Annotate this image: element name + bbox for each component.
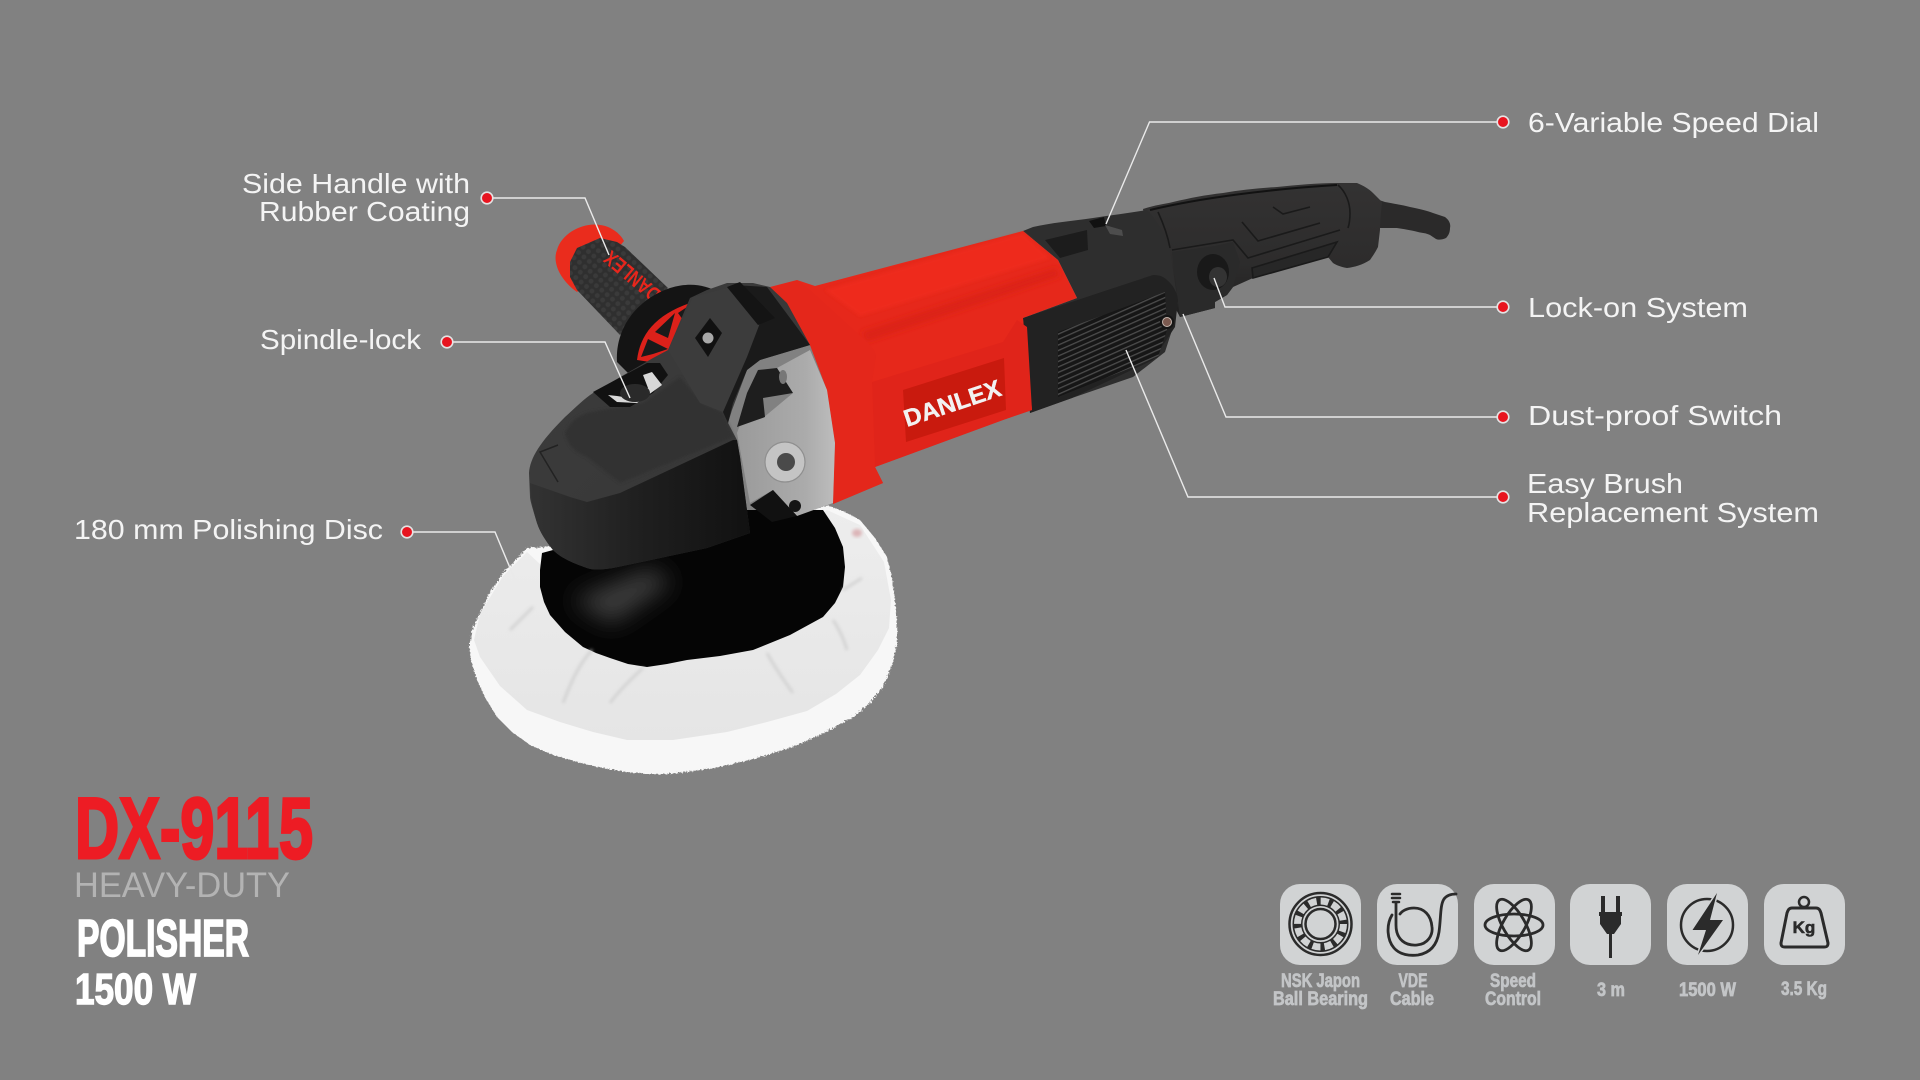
silver gearbox [737, 350, 835, 522]
end cap seam [1338, 185, 1350, 228]
label: Spindle-lock: Spindle-lock [260, 324, 422, 355]
label: Side Handle with Rubber Coating: Side Handle with [242, 168, 470, 199]
spindle lock [608, 372, 662, 403]
speed dial [1089, 217, 1123, 236]
gearbox bolt [789, 500, 801, 512]
dot [1497, 301, 1509, 313]
guard outer shell [529, 283, 810, 570]
spec: speed control [1474, 884, 1555, 1010]
caption: 3 m [1597, 980, 1625, 1001]
callout leader: lock-on system [1214, 278, 1509, 313]
callout leader: easy brush replacement [1126, 350, 1509, 503]
flange rim [617, 285, 718, 385]
label: Lock-on System: Lock-on System [1528, 292, 1748, 323]
spindle window [593, 363, 668, 407]
label: 180 mm Polishing Disc: 180 mm Polishing Disc [74, 514, 383, 545]
label: Easy Brush Replacement System: Easy Brush [1527, 468, 1683, 499]
label: Side Handle with Rubber Coating [242, 168, 470, 227]
front collar [770, 280, 883, 504]
caption: Control [1485, 989, 1541, 1010]
callout leader: side handle [481, 192, 609, 255]
flange wells [641, 307, 687, 357]
logo: DANLEX [900, 375, 1005, 433]
label: Side Handle with Rubber Coating: Rubber Coating [259, 196, 470, 227]
spec: VDE cable [1377, 884, 1458, 1010]
caption: Speed [1490, 971, 1536, 992]
handle slot [1252, 242, 1337, 278]
lock panel [1172, 242, 1240, 317]
guard bolt [702, 332, 714, 344]
guard marking [540, 445, 558, 482]
icon: atom [1474, 884, 1555, 965]
icon: bearing [1280, 884, 1361, 965]
dot [1497, 116, 1509, 128]
logo plate [903, 358, 1006, 442]
top seam [1150, 185, 1337, 210]
dot [1497, 491, 1509, 503]
power cord [1376, 199, 1450, 240]
brush screw [1160, 315, 1174, 329]
dark switch housing [1023, 210, 1178, 413]
callout leader: spindle-lock [441, 336, 630, 398]
grip notch [1273, 207, 1310, 214]
brush vent [1058, 292, 1167, 397]
collar band [723, 285, 810, 423]
plate highlight [572, 568, 672, 624]
gearbox screw [779, 370, 787, 384]
clip tab [727, 282, 775, 325]
caption: VDE [1398, 971, 1428, 992]
black guard head [529, 282, 810, 570]
callout leader: polishing disc [401, 526, 523, 599]
dot [481, 192, 493, 204]
lower face [872, 320, 1032, 467]
spec: ball bearing [1273, 884, 1368, 1010]
caption: NSK Japon [1281, 971, 1360, 992]
body seam [1158, 212, 1170, 248]
spec: power [1667, 884, 1748, 1001]
side handle [556, 224, 718, 385]
heavy-duty: HEAVY-DUTY [74, 866, 290, 905]
label: Easy Brush Replacement System [1527, 468, 1819, 528]
fleece rim [469, 505, 897, 774]
rubber grip [570, 238, 668, 335]
icon: weight: Kg [1793, 918, 1815, 937]
caption [1273, 971, 1368, 1010]
label: Easy Brush Replacement System: Replacement System [1527, 497, 1819, 528]
boss bore [777, 453, 795, 471]
caption: 3.5 Kg [1781, 979, 1827, 1000]
guard bolt recess [695, 318, 722, 357]
wattage: 1500 W [75, 965, 196, 1014]
model number: DX-9115 [75, 781, 313, 877]
caption [1485, 971, 1541, 1010]
switch recess [1045, 230, 1088, 258]
icon: cable [1377, 884, 1458, 965]
dome [565, 377, 733, 483]
caption [1390, 971, 1434, 1010]
spec: cable length [1570, 884, 1651, 1001]
caption: Cable [1390, 989, 1434, 1010]
red motor body [770, 231, 1077, 504]
handle details [1150, 185, 1350, 278]
black backing plate [540, 510, 845, 667]
gearbox recess [737, 368, 793, 427]
rear handle [1143, 183, 1382, 317]
body base [797, 231, 1077, 504]
bonnet stain [852, 529, 862, 537]
top highlight [825, 233, 1050, 316]
icon: plug [1570, 884, 1651, 965]
flange red hub [637, 303, 692, 362]
underside shadow [750, 490, 797, 522]
lock panel edge [1172, 230, 1340, 258]
bonnet folds [510, 578, 862, 703]
caption: Ball Bearing [1273, 989, 1368, 1010]
ridge [862, 268, 1060, 342]
callout leader: dust-proof switch [1183, 314, 1509, 423]
polishing pad [469, 505, 897, 774]
callout leader: 6-variable speed dial [1106, 116, 1509, 224]
polisher: POLISHER [77, 910, 249, 968]
threaded boss [765, 442, 805, 482]
title block [74, 781, 313, 1014]
spec: weight [1764, 884, 1845, 1000]
dot [441, 336, 453, 348]
label: Dust-proof Switch: Dust-proof Switch [1528, 400, 1782, 431]
mount piece [668, 288, 760, 412]
lock-on button [1197, 254, 1229, 290]
grip chevron [1242, 222, 1320, 241]
icon: lightning [1667, 884, 1748, 965]
dot [1497, 411, 1509, 423]
cloth band [474, 510, 891, 740]
grip logo: DANLEX [600, 246, 665, 306]
dot [401, 526, 413, 538]
vent panel [1023, 275, 1178, 413]
lower guard band [530, 440, 750, 570]
caption: 1500 W [1679, 980, 1736, 1001]
label: 6-Variable Speed Dial: 6-Variable Speed Dial [1528, 107, 1819, 138]
red end cap [556, 224, 624, 292]
polisher product illustration [469, 183, 1450, 774]
